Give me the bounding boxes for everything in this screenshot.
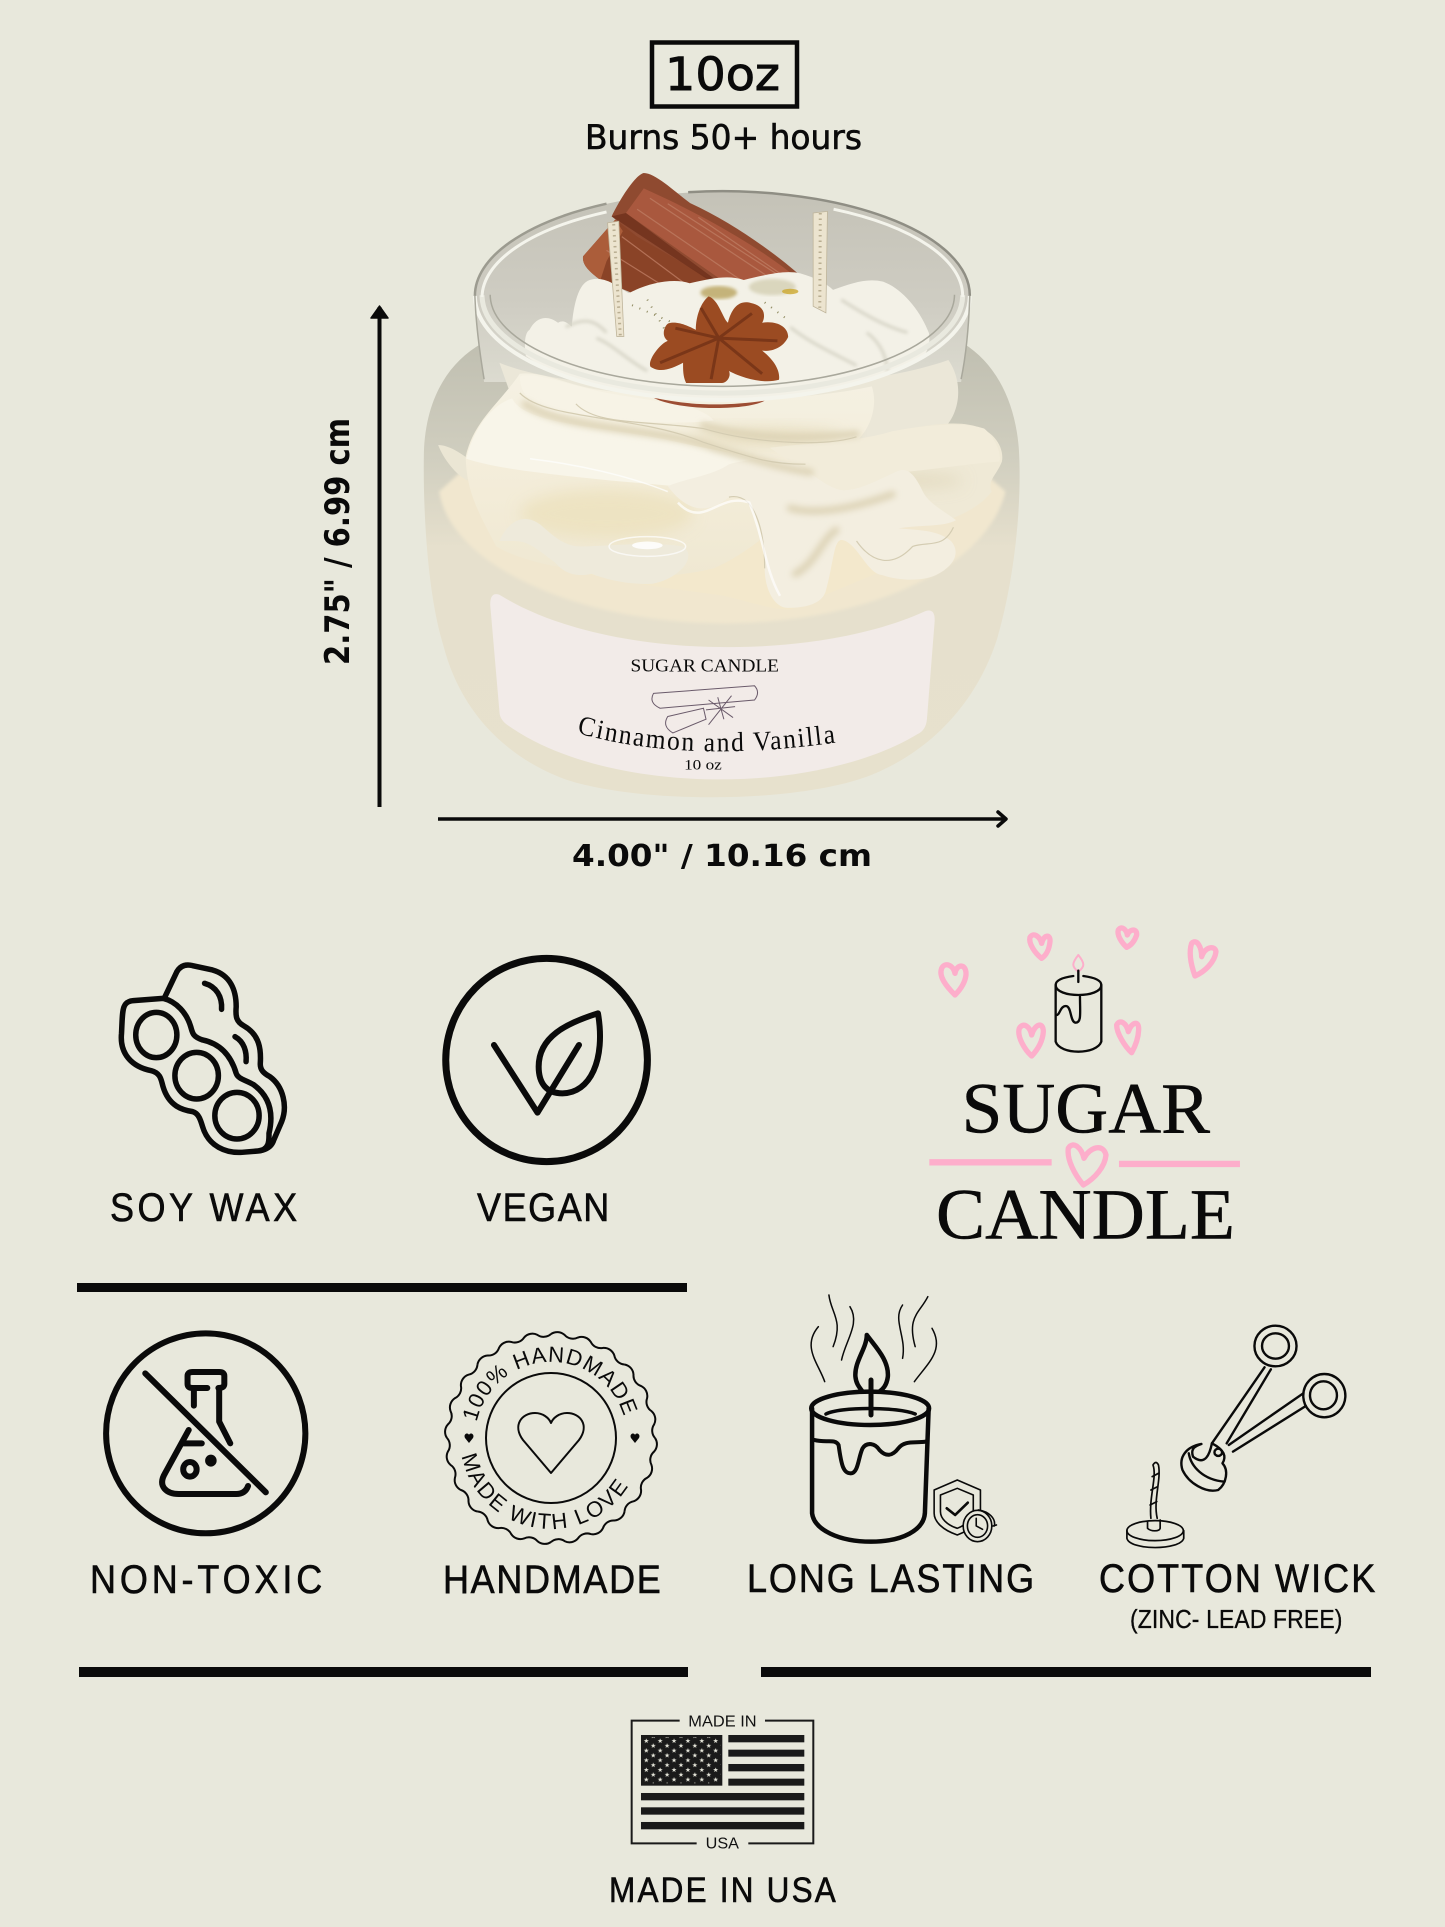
cream underlayer — [566, 514, 882, 610]
seal upper text: 100% HANDMADE — [464, 1346, 638, 1420]
flag stripes and canton — [641, 1735, 804, 1829]
main frosting swirl — [466, 373, 874, 576]
cotton wick sublabel: (ZINC- LEAD FREE) — [1130, 1606, 1342, 1634]
cotton wick label: COTTON WICK — [1099, 1557, 1375, 1601]
label cinnamon drawing — [652, 686, 758, 733]
badge: handmade seal — [444, 1331, 658, 1545]
long lasting label: LONG LASTING — [747, 1557, 1034, 1601]
shield and clock — [934, 1480, 996, 1542]
logo word: candle: CANDLE — [936, 1174, 1235, 1254]
icon: vegan leaf — [446, 958, 647, 1162]
logo word: sugar: SUGAR — [962, 1068, 1210, 1148]
icon: soy wax — [121, 965, 284, 1152]
star anise petal detail — [660, 308, 777, 379]
height arrow — [371, 306, 388, 807]
height text: 2.75" / 6.99 cm — [318, 418, 358, 665]
candle product photo illustration — [424, 173, 1020, 797]
ribbon: right swirl — [770, 425, 1000, 490]
size badge: 10oz — [652, 42, 797, 106]
flag top text: MADE IN — [688, 1714, 757, 1731]
seal dots — [465, 1434, 639, 1443]
seal heart — [518, 1413, 584, 1473]
top frosting — [525, 272, 929, 398]
icon: non toxic flask — [106, 1333, 305, 1533]
label brand: SUGAR CANDLE — [631, 656, 779, 676]
label size: 10 oz — [684, 757, 722, 774]
ruffle right — [668, 460, 956, 608]
size badge: 10oz: 10oz — [665, 48, 780, 101]
burn time text: Burns 50+ hours — [585, 118, 862, 158]
width arrow — [438, 812, 1006, 826]
logo: sugar candle — [929, 928, 1240, 1254]
icon: long lasting candle — [811, 1295, 996, 1542]
seal lower text: MADE WITH LOVE — [462, 1453, 628, 1530]
ribbon: upper roll — [520, 375, 714, 423]
width text: 4.00" / 10.16 cm — [572, 839, 872, 874]
product label — [490, 594, 935, 779]
frosting ribbon outlines — [520, 393, 953, 568]
glass rim — [475, 191, 970, 400]
frosting peak shading — [566, 300, 908, 371]
cinnamon sticks — [583, 173, 812, 296]
ruffle left — [499, 519, 688, 584]
divider bar right — [761, 1667, 1371, 1677]
handmade label: HANDMADE — [443, 1558, 661, 1602]
smoke lines — [811, 1295, 936, 1382]
flag bottom text: USA — [706, 1835, 740, 1852]
ribbon: middle swirl — [466, 398, 841, 503]
jar body — [424, 344, 1020, 797]
made in usa label: MADE IN USA — [609, 1872, 837, 1910]
vegan label: VEGAN — [477, 1186, 609, 1230]
anise reflection — [652, 397, 765, 408]
icon: wick trimmer and wick — [1127, 1326, 1345, 1548]
logo hearts — [929, 928, 1240, 1185]
icon: made in usa flag — [632, 1714, 813, 1852]
frosting back right — [841, 424, 1002, 522]
glitter — [632, 279, 798, 344]
frosting shading — [525, 404, 892, 574]
wick on base — [1127, 1462, 1184, 1548]
divider bar left upper — [77, 1283, 687, 1292]
logo candle — [1056, 971, 1101, 1052]
wicks — [608, 211, 827, 336]
wax inside jar — [439, 437, 1006, 623]
non-toxic label: NON-TOXIC — [90, 1558, 322, 1602]
glass highlights — [530, 459, 780, 596]
jar neck and interior — [475, 192, 970, 442]
star anise — [650, 296, 788, 383]
soy wax label: SOY WAX — [110, 1186, 297, 1230]
frosting behind left — [438, 445, 468, 481]
soft yellow shading — [520, 429, 964, 538]
divider bar left lower — [79, 1667, 688, 1677]
label flavour name: Cinnamon and Vanilla — [579, 717, 836, 752]
